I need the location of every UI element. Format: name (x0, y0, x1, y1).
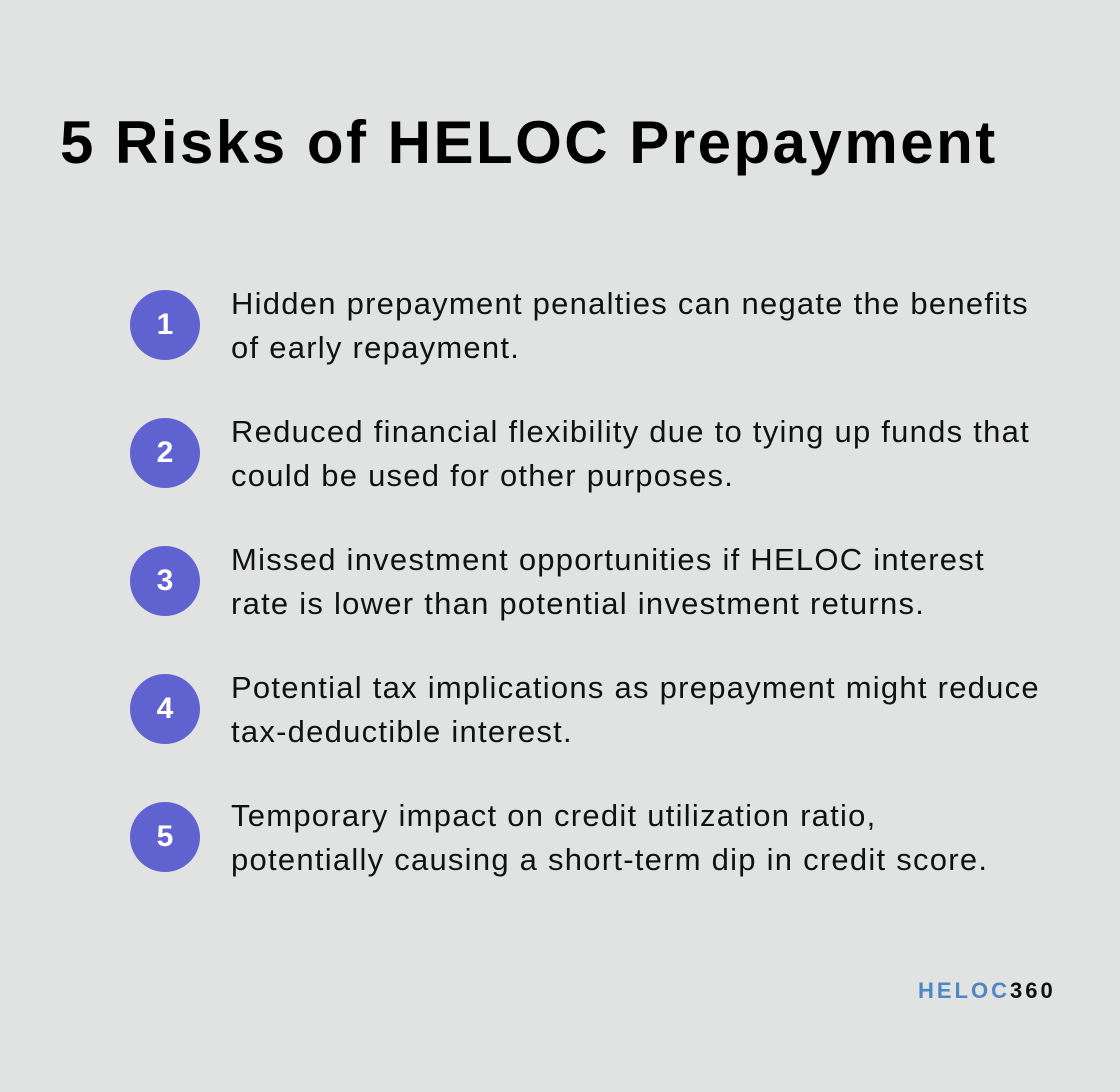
item 5: potentially causing a short-term dip in credit score. (231, 842, 988, 877)
item 3: Missed investment opportunities if HELOC interest (231, 542, 985, 577)
item 5: 5 (157, 820, 173, 853)
item 5: Temporary impact on credit utilization ratio, (231, 798, 876, 833)
item 3: rate is lower than potential investment returns. (231, 586, 925, 621)
title: 5 Risks of HELOC Prepayment (60, 109, 998, 176)
item 2: Reduced financial flexibility due to tying up funds that (231, 414, 1030, 449)
item 1 (130, 286, 1029, 365)
item 4: tax-deductible interest. (231, 714, 573, 749)
item 3 (130, 542, 985, 621)
item 1: Hidden prepayment penalties can negate the benefits (231, 286, 1029, 321)
item 5 (130, 798, 988, 877)
item 1: 1 (157, 308, 173, 341)
item 2: 2 (157, 436, 173, 469)
item 4: Potential tax implications as prepayment might reduce (231, 670, 1040, 705)
item 4: 4 (157, 692, 173, 725)
item 1: of early repayment. (231, 330, 520, 365)
item 4 (130, 670, 1040, 749)
item 2: could be used for other purposes. (231, 458, 734, 493)
item 3: 3 (157, 564, 173, 597)
logo: HELOC360 (918, 978, 1056, 1003)
item 2 (130, 414, 1030, 493)
